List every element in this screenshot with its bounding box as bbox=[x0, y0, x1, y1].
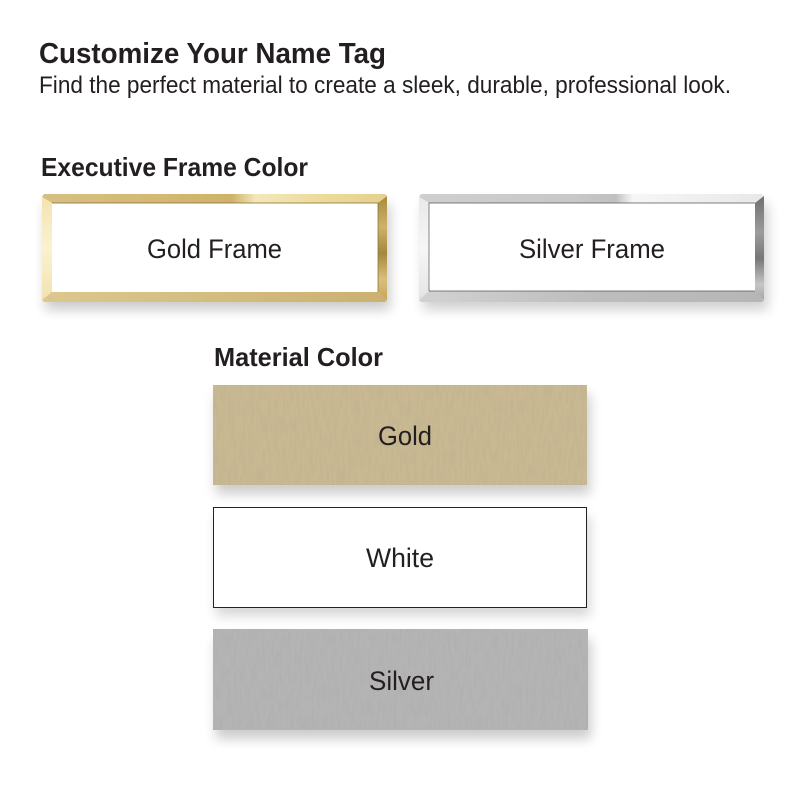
label: White: White bbox=[366, 543, 434, 573]
heading: Material Color: Material Color bbox=[214, 342, 383, 372]
swatch: silver bbox=[213, 629, 591, 739]
swatch: gold bbox=[213, 385, 590, 494]
title: Customize Your Name Tag bbox=[39, 38, 386, 70]
subtitle: Find the perfect material to create a sleek, durable, professional look. bbox=[39, 72, 731, 99]
name tag: silver frame bbox=[419, 194, 768, 310]
name tag: gold frame bbox=[42, 194, 390, 310]
label: Gold Frame: Gold Frame bbox=[147, 234, 282, 264]
heading: Executive Frame Color: Executive Frame Color bbox=[41, 152, 308, 182]
swatch: white bbox=[214, 508, 590, 616]
label: Silver Frame: Silver Frame bbox=[519, 234, 665, 264]
label: Gold: Gold bbox=[378, 421, 432, 451]
label: Silver: Silver bbox=[369, 666, 434, 696]
